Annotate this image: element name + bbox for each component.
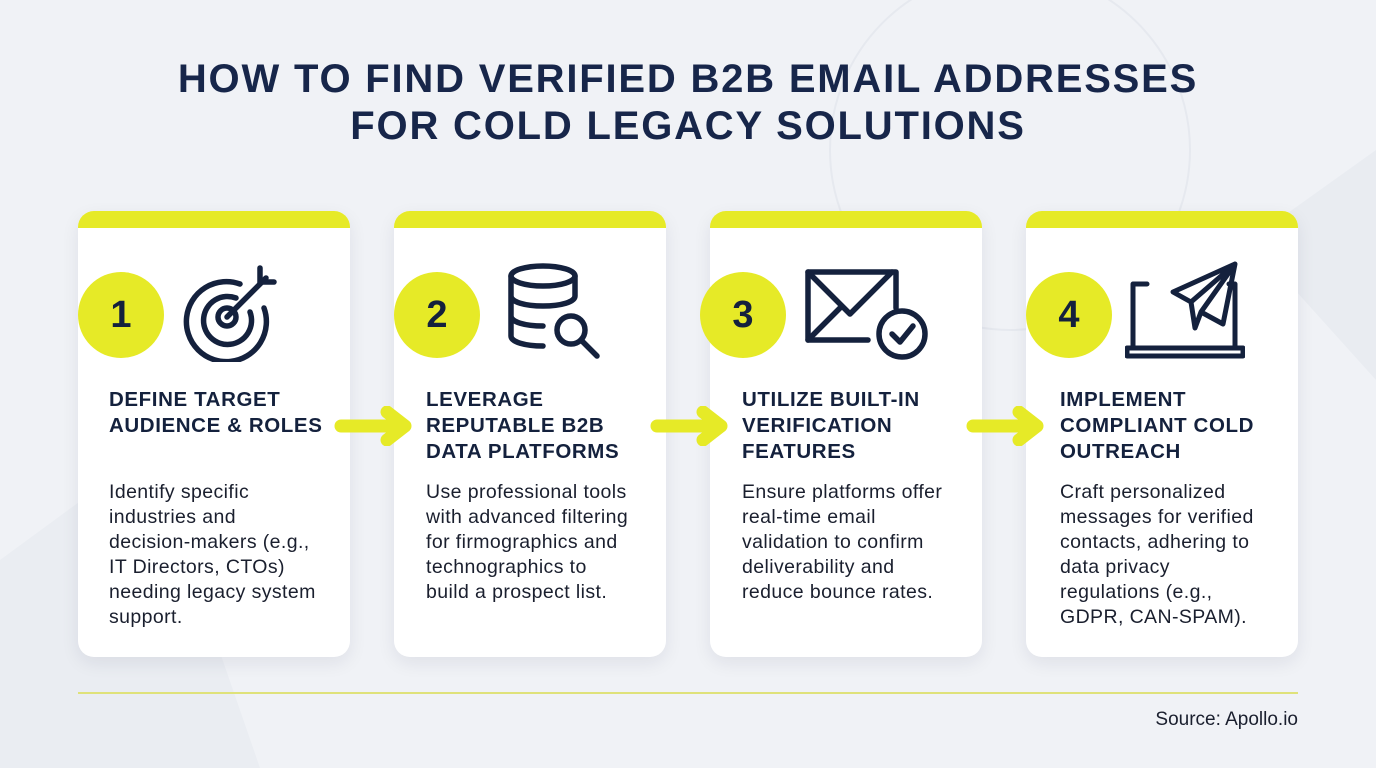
icon: envelope check [805,269,928,360]
heading 3: UTILIZE BUILT-IN [742,388,920,411]
text 3: reduce bounce rates. [742,581,933,603]
panel: step 2 [394,211,666,657]
number badge 4 [1026,272,1112,358]
arrow 2 [650,406,728,446]
heading 2: DATA PLATFORMS [426,440,619,463]
panel: step 1 [78,211,350,657]
text 3 [742,481,942,603]
number badge 2: 2 [426,294,448,336]
text 1: needing legacy system [109,581,316,603]
heading 3: VERIFICATION [742,414,892,437]
number badge 1 [78,272,164,358]
heading 4: OUTREACH [1060,440,1181,463]
title [178,57,1198,148]
heading 1 [109,388,322,437]
text 1: industries and [109,506,236,528]
text 4 [1060,481,1254,628]
heading 3: FEATURES [742,440,856,463]
text 3: real-time email [742,506,876,528]
source: Source: Apollo.io [1155,709,1298,730]
title: HOW TO FIND VERIFIED B2B EMAIL ADDRESSES [178,57,1198,101]
text 1: IT Directors, CTOs) [109,556,285,578]
text 3: validation to confirm [742,531,924,553]
text 1: Identify specific [109,481,249,503]
heading 4 [1060,388,1254,463]
text 2 [426,481,628,603]
number badge 1: 1 [110,294,132,336]
text 2: build a prospect list. [426,581,607,603]
number badge 3 [700,272,786,358]
text 1: support. [109,606,183,628]
icon: laptop paper plane [1125,262,1245,358]
number badge 3: 3 [732,294,754,336]
text 3: deliverability and [742,556,894,578]
heading 2: REPUTABLE B2B [426,414,604,437]
panel: step 3 [710,211,982,657]
title: FOR COLD LEGACY SOLUTIONS [350,104,1026,148]
text 2: for firmographics and [426,531,618,553]
text 2: Use professional tools [426,481,627,503]
heading 4: IMPLEMENT [1060,388,1186,411]
heading 1: DEFINE TARGET [109,388,280,411]
text 1 [109,481,316,628]
text 4: data privacy [1060,556,1170,578]
arrow 3 [966,406,1044,446]
icon: target [184,265,277,362]
text 4: messages for verified [1060,506,1254,528]
arrow 1 [334,406,412,446]
text 4: regulations (e.g., [1060,581,1212,603]
heading 1: AUDIENCE & ROLES [109,414,322,437]
text 4: Craft personalized [1060,481,1225,503]
text 4: contacts, adhering to [1060,531,1249,553]
icon: database search [508,263,600,359]
heading 2 [426,388,619,463]
heading 2: LEVERAGE [426,388,544,411]
text 1: decision-makers (e.g., [109,531,310,553]
heading 3 [742,388,920,463]
number badge 4: 4 [1058,294,1080,336]
heading 4: COMPLIANT COLD [1060,414,1254,437]
text 2: technographics to [426,556,587,578]
text 3: Ensure platforms offer [742,481,942,503]
text 2: with advanced filtering [426,506,628,528]
panel: step 4 [1026,211,1298,657]
text 4: GDPR, CAN-SPAM). [1060,606,1247,628]
number badge 2 [394,272,480,358]
